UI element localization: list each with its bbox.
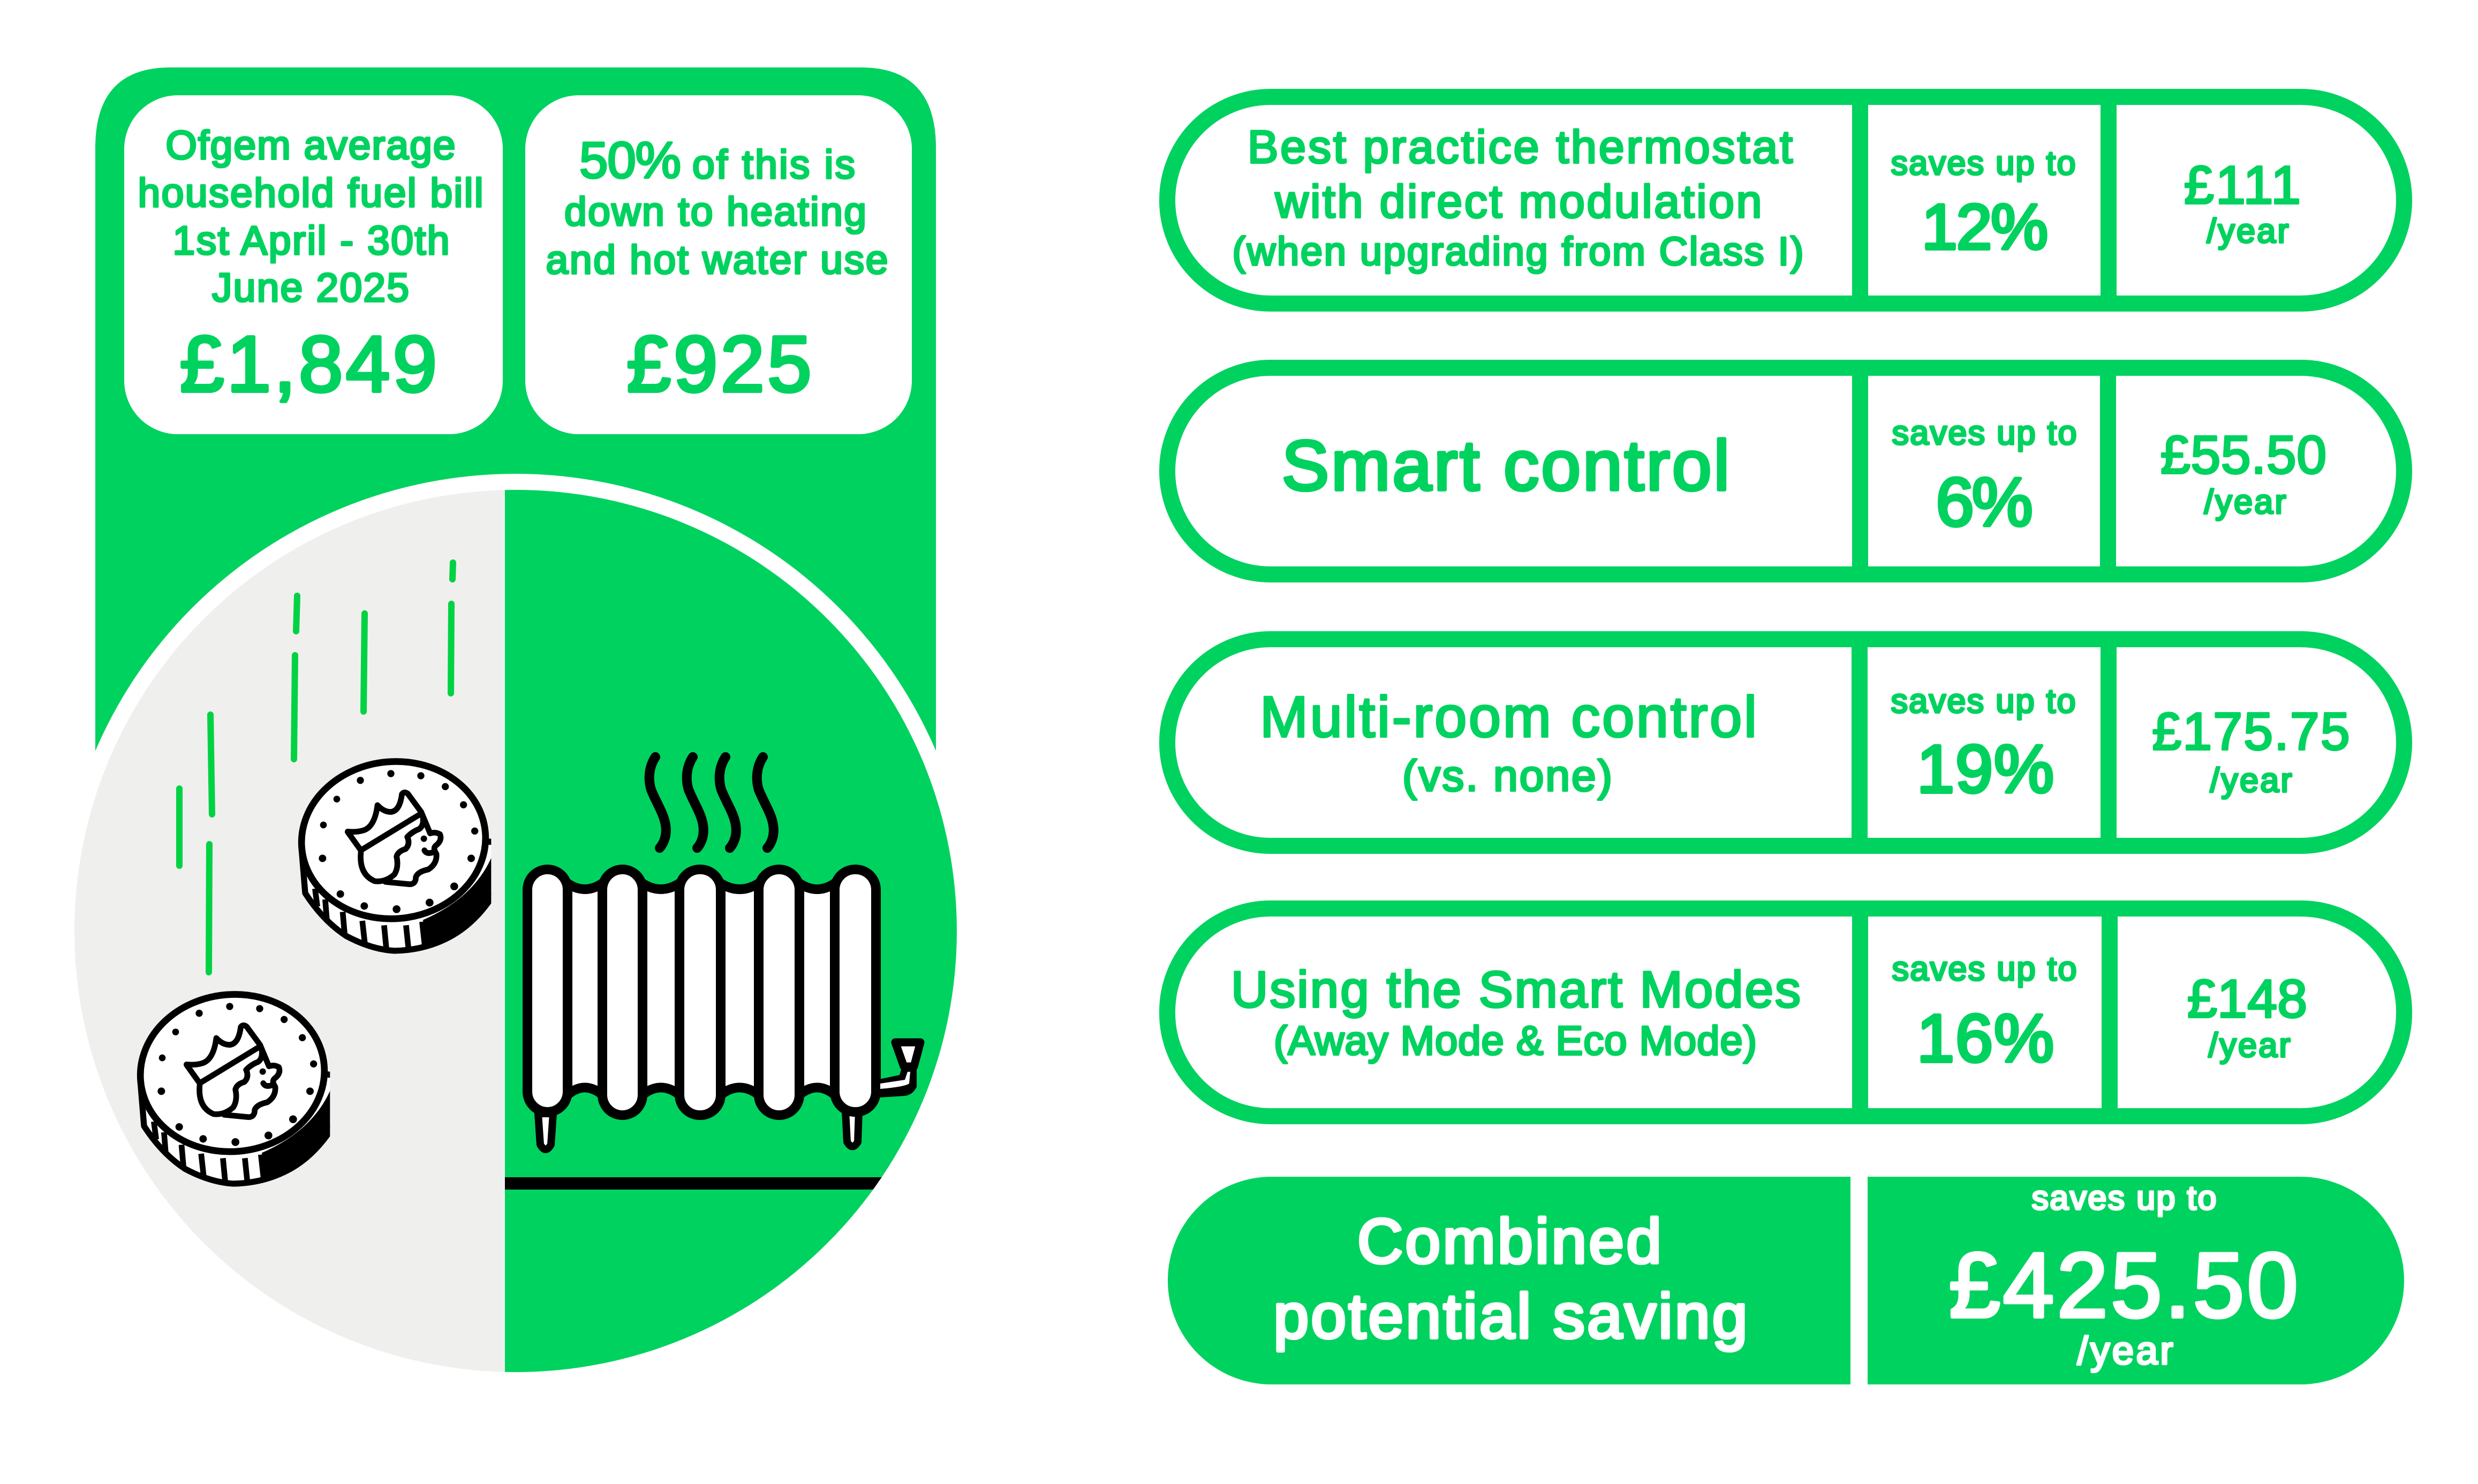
label: potential saving: [1273, 1281, 1748, 1352]
row outline: [1167, 639, 2404, 846]
column dividers: [1852, 902, 2118, 1124]
card: average fuel bill: [124, 95, 503, 434]
label: [1231, 961, 1801, 1064]
label: Best practice thermostat: [1248, 122, 1793, 173]
radiator columns: [527, 869, 876, 1115]
yearly amount: /year: [2210, 762, 2292, 799]
column dividers: [1852, 362, 2116, 581]
percentage: saves up to: [1892, 414, 2076, 452]
yearly amount: £148: [2187, 969, 2307, 1029]
label: Combined: [1357, 1206, 1661, 1277]
yearly amount: £111: [2184, 155, 2301, 215]
icon: steam: [649, 757, 774, 848]
panel: green bill shield: [95, 67, 936, 803]
column dividers: [1852, 632, 2117, 852]
grey half circle: [74, 490, 505, 1372]
label: with direct modulation: [1274, 176, 1762, 228]
floor line: [505, 1177, 881, 1190]
card: heating share: 50%: [579, 132, 681, 189]
yearly amount: [2160, 425, 2326, 521]
icon: coin lower: [134, 987, 335, 1184]
card: average fuel bill: June 2025: [212, 265, 409, 310]
label: (Away Mode & Eco Mode): [1274, 1018, 1757, 1064]
label: [1273, 1206, 1748, 1352]
card: average fuel bill: 1st April - 30th: [172, 218, 450, 263]
radiator feet: [538, 1111, 859, 1149]
shield background: [95, 67, 936, 803]
percentage: [1892, 414, 2076, 541]
yearly amount: [2187, 969, 2307, 1064]
combined amount: £425.50: [1949, 1234, 2298, 1337]
label: (when upgrading from Class I): [1233, 229, 1803, 274]
panel: multi-room saving: [1167, 632, 2404, 852]
yearly amount: £175.75: [2152, 702, 2349, 761]
percentage: saves up to: [1891, 145, 2075, 182]
combined amount: saves up to: [2031, 1179, 2217, 1217]
card: heating share: and hot water use: [546, 237, 888, 282]
label: Using the Smart Modes: [1231, 961, 1801, 1018]
panel: combined saving: [1168, 1177, 2404, 1384]
yearly amount: [2152, 702, 2349, 799]
card: heating share: £925: [626, 320, 812, 408]
radiator valve: [879, 1042, 920, 1097]
card: heating share: [525, 95, 912, 434]
label: (vs. none): [1402, 752, 1612, 800]
column dividers: [1852, 91, 2117, 311]
card: heating share: of this is: [692, 142, 855, 187]
icon: coin upper: [295, 754, 496, 951]
yearly amount: /year: [2204, 483, 2286, 521]
panel: thermostat saving: [1167, 91, 2404, 311]
card: average fuel bill: household fuel bill: [138, 170, 483, 215]
percentage: saves up to: [1892, 950, 2076, 988]
label: [1233, 122, 1803, 274]
yearly amount: /year: [2207, 213, 2288, 250]
row outline: [1167, 908, 2404, 1116]
panel: smart modes saving: [1167, 902, 2404, 1124]
combined amount: /year: [2077, 1329, 2173, 1373]
radiator web sections: [568, 883, 835, 1095]
yearly amount: /year: [2208, 1027, 2291, 1064]
label: Multi-room control: [1260, 684, 1757, 749]
percentage: [1892, 950, 2076, 1076]
percentage: [1891, 145, 2075, 263]
yearly amount: £55.50: [2160, 425, 2326, 485]
icon: radiator: [527, 757, 920, 1149]
percentage: 19%: [1917, 731, 2054, 807]
percentage: 16%: [1917, 1001, 2054, 1076]
panel: smart control saving: [1167, 362, 2404, 581]
percentage: saves up to: [1891, 683, 2075, 720]
percentage: 6%: [1936, 464, 2033, 541]
label: [1260, 684, 1757, 800]
row outline: [1167, 97, 2404, 304]
white ring: [58, 474, 973, 1388]
falling motion lines: [179, 563, 453, 972]
card: average fuel bill: £1,849: [180, 320, 437, 408]
row outline: [1167, 368, 2404, 574]
label: Smart control: [1282, 426, 1729, 505]
yearly amount: [2184, 155, 2301, 250]
percentage: [1891, 683, 2075, 807]
filled pill: [1168, 1177, 2404, 1384]
percentage: 12%: [1922, 191, 2048, 263]
combined amount: [1949, 1179, 2298, 1373]
green half circle: [505, 490, 957, 1372]
card: average fuel bill: Ofgem average: [166, 123, 455, 168]
card: heating share: down to heating: [564, 189, 866, 234]
panel: illustration circle: [74, 490, 957, 1372]
